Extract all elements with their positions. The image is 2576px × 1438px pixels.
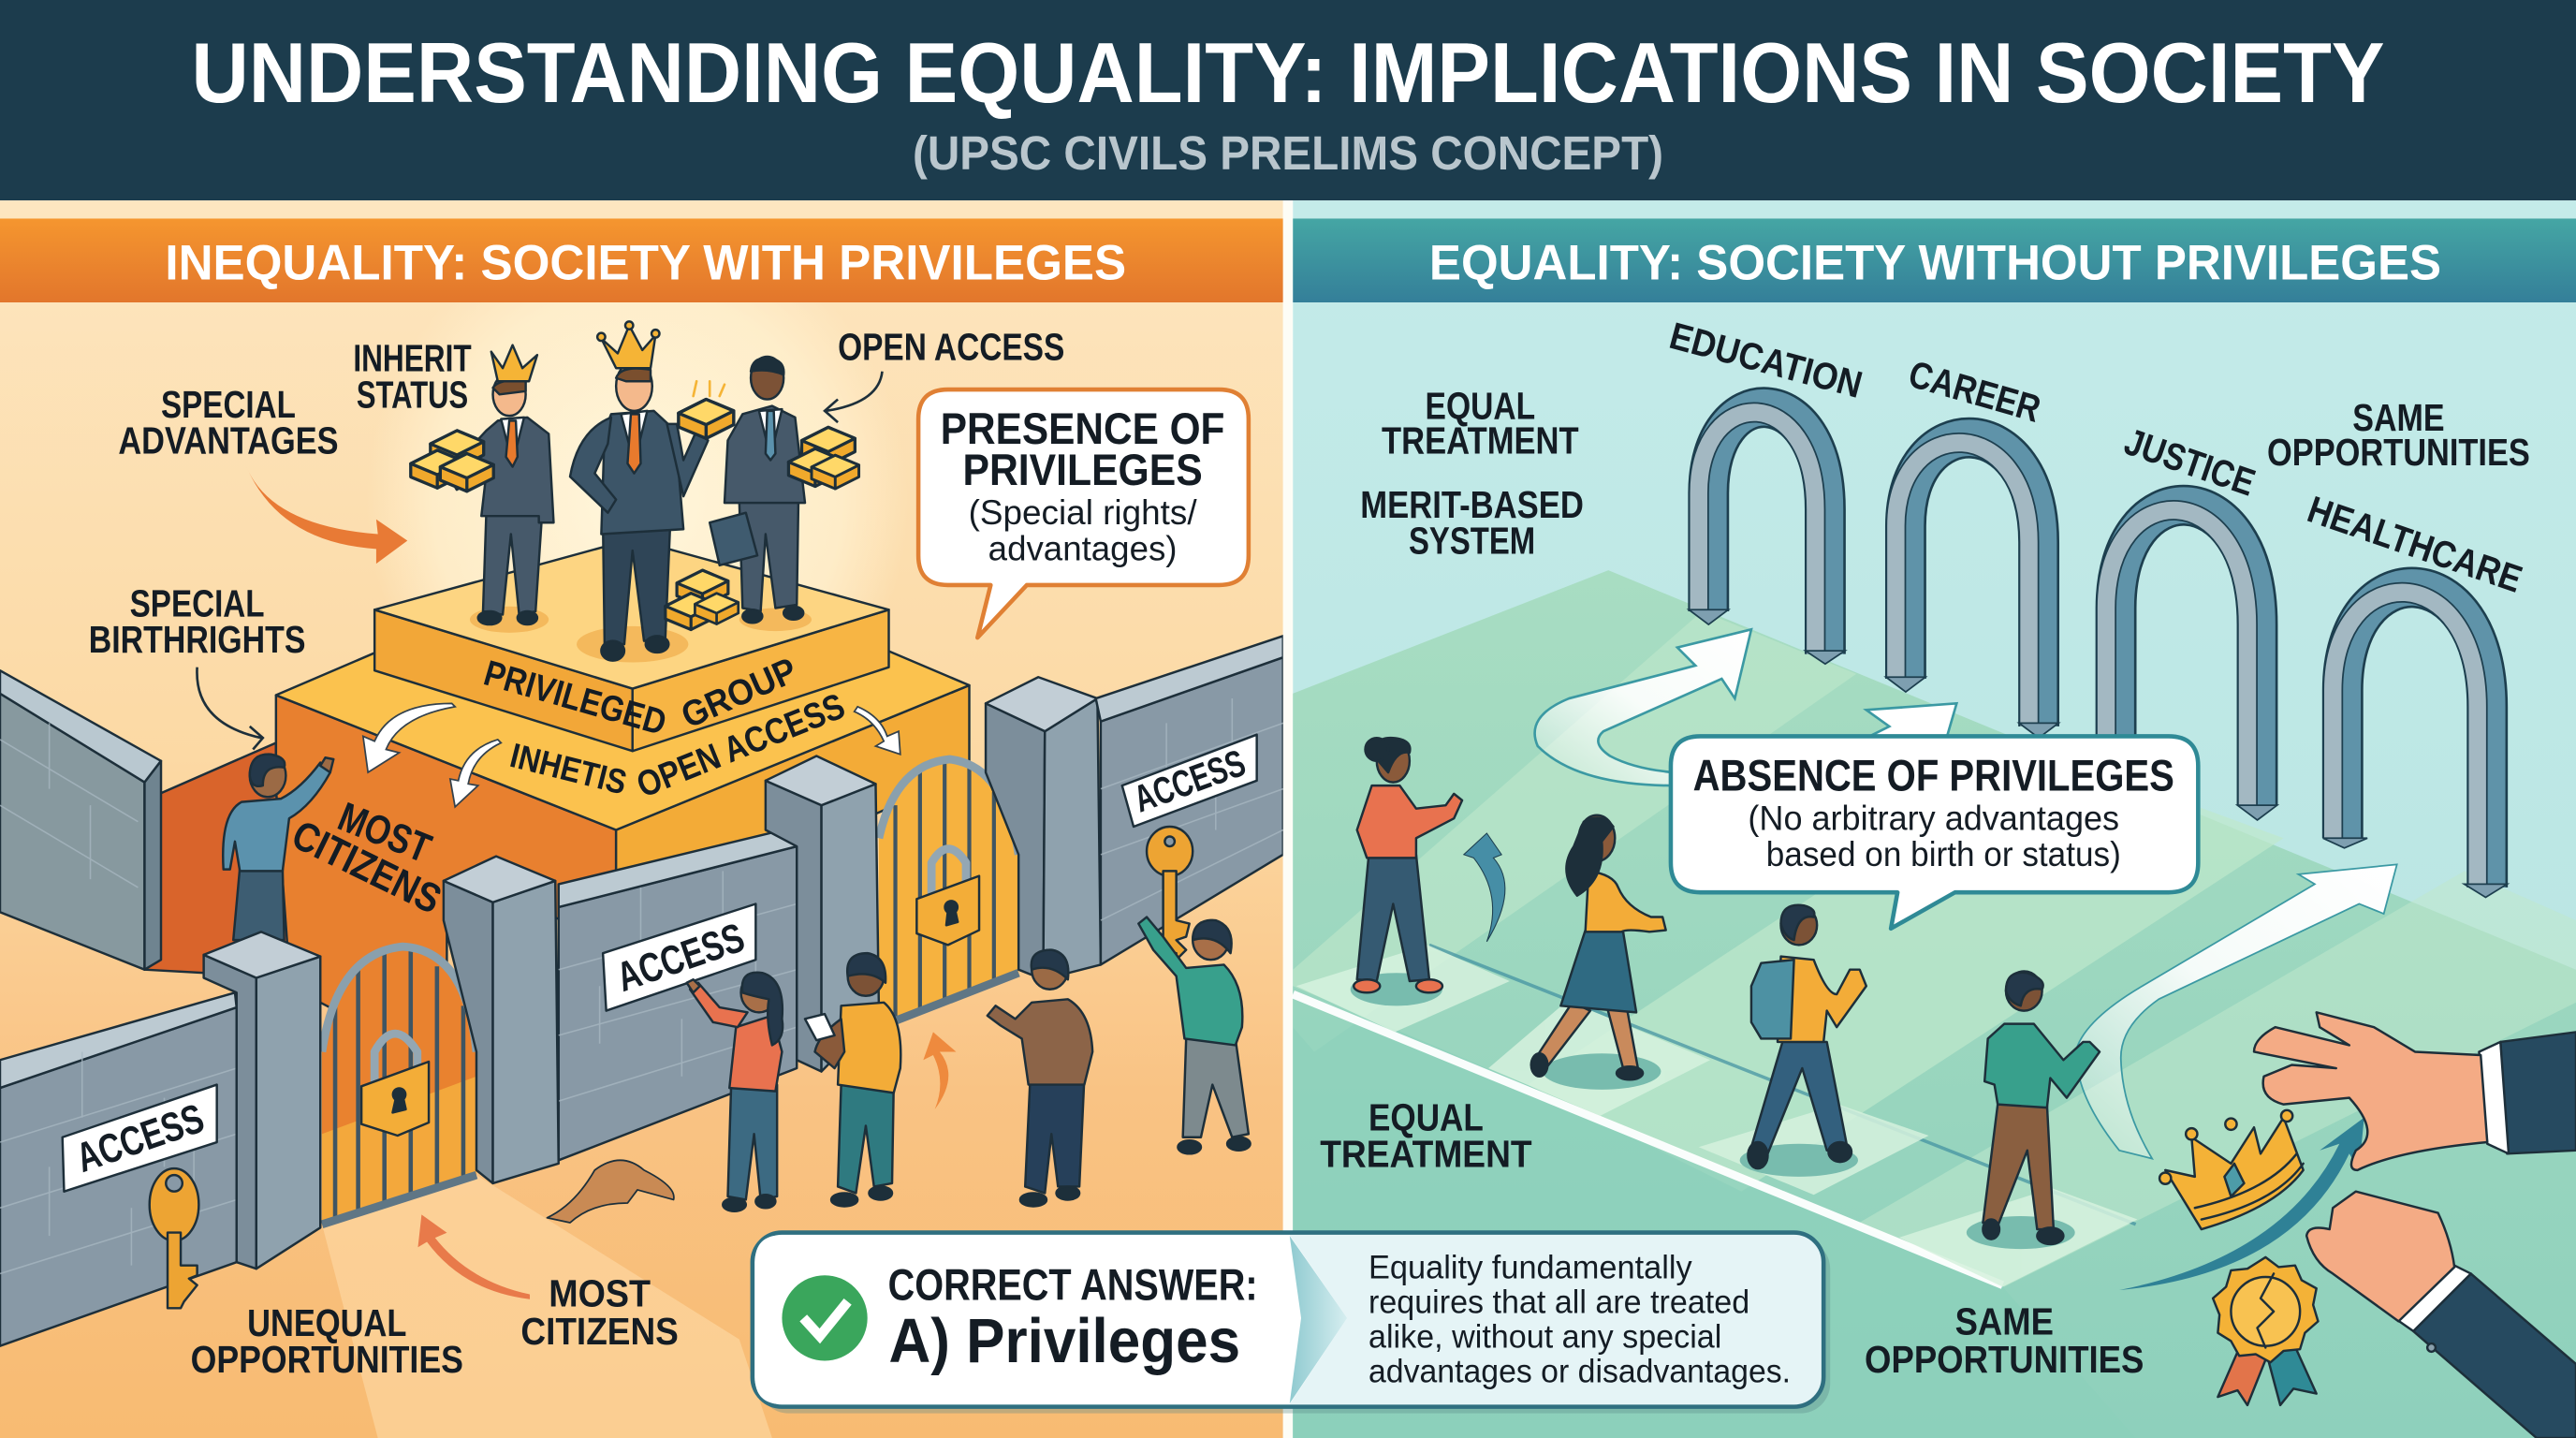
businessman left — [411, 345, 553, 633]
label: same opportunities top: OPPORTUNITIES — [2267, 431, 2530, 474]
presence of privileges speech bubble: (Special rights/ — [969, 493, 1197, 532]
absence of privileges speech bubble: (No arbitrary advantages — [1748, 799, 2119, 837]
upper left wall — [0, 670, 161, 970]
panel: inequality — [0, 200, 1283, 1438]
answer value: A) Privileges — [889, 1307, 1240, 1376]
gate one — [322, 946, 476, 1225]
correct answer card — [753, 1233, 1830, 1414]
label: special birthrights — [89, 581, 305, 661]
gate two — [879, 759, 1018, 1027]
person: walker in green — [1967, 971, 2100, 1249]
climbing person — [223, 755, 333, 940]
panel: equality — [1293, 200, 2576, 1438]
icon: lower hand — [2306, 1192, 2576, 1438]
label: open access: OPEN ACCESS — [838, 325, 1064, 368]
presence of privileges speech bubble: advantages) — [988, 530, 1178, 568]
label: unequal opportunities: UNEQUAL — [247, 1301, 406, 1344]
presence of privileges speech bubble: PRESENCE OF — [941, 404, 1224, 454]
privileged group label: GROUP — [676, 651, 803, 737]
label: justice: JUSTICE — [2119, 419, 2261, 504]
person: walker with backpack — [1740, 905, 1866, 1177]
businessman centre — [570, 321, 739, 662]
divider — [1283, 200, 1293, 1438]
arrow: special birthrights — [197, 668, 263, 749]
icon: check mark — [782, 1275, 868, 1360]
person: man in yellow with paper — [805, 953, 900, 1206]
pillar two — [444, 857, 559, 1183]
label: healthcare: HEALTHCARE — [2303, 487, 2527, 601]
label: unequal opportunities — [191, 1301, 463, 1381]
inequality heading: INEQUALITY: SOCIETY WITH PRIVILEGES — [165, 235, 1126, 290]
answer explanation — [1368, 1250, 1791, 1389]
label: same opportunities bottom: OPPORTUNITIES — [1865, 1338, 2144, 1381]
light rays on ground — [322, 1175, 772, 1438]
answer heading: CORRECT ANSWER: — [888, 1261, 1258, 1311]
answer explanation: advantages or disadvantages. — [1368, 1353, 1791, 1389]
broken rock on ground — [547, 1160, 674, 1223]
arch: education — [1689, 407, 1845, 664]
label: education: EDUCATION — [1665, 314, 1866, 406]
arrow: teal sweep — [2119, 1118, 2364, 1290]
label: same opportunities bottom — [1865, 1299, 2144, 1381]
right wall with access sign and key: ACCESS — [1128, 741, 1251, 820]
label: special advantages — [118, 383, 339, 462]
icon: crown — [491, 345, 537, 381]
arch: justice — [2106, 506, 2277, 820]
access sign lower left with key — [63, 1085, 217, 1308]
label: equal treatment bottom: TREATMENT — [1320, 1132, 1532, 1175]
person: walker in yellow — [1531, 815, 1666, 1090]
icon: key — [1147, 827, 1193, 960]
label: inherit status: INHERIT — [353, 337, 472, 380]
person: man in teal pointing — [1138, 917, 1251, 1153]
white down arrows — [363, 703, 900, 807]
padlock — [361, 1034, 429, 1136]
label: same opportunities top — [2267, 396, 2530, 474]
privileged group label — [479, 651, 803, 743]
label: merit based system — [1360, 483, 1584, 563]
arch: career — [1886, 438, 2058, 738]
subtitle: (UPSC CIVILS PRELIMS CONCEPT) — [913, 126, 1663, 180]
label: most citizens: CITIZENS — [520, 1310, 679, 1353]
label: special birthrights: SPECIAL — [130, 581, 265, 624]
pillar four — [986, 677, 1101, 979]
privileged group label: PRIVILEGED — [479, 653, 670, 743]
icon: backpack — [1751, 960, 1794, 1038]
arrow: white arrow to career — [1856, 703, 1956, 742]
label: special advantages: SPECIAL — [161, 383, 296, 426]
label: career: CAREER — [1904, 352, 2045, 431]
label: merit based system: SYSTEM — [1409, 520, 1535, 563]
person: walker in red — [1351, 738, 1462, 1005]
person: woman in red — [687, 973, 783, 1211]
label: same opportunities bottom: SAME — [1955, 1299, 2054, 1343]
label: most citizens: MOST — [549, 1272, 651, 1315]
mid wall with access sign: ACCESS — [611, 915, 750, 1001]
arrow: small up arrow — [923, 1032, 956, 1109]
arrow: white arrow to healthcare — [2076, 864, 2397, 1159]
header band — [0, 0, 2576, 200]
answer explanation: alike, without any special — [1368, 1318, 1721, 1355]
tier label — [506, 686, 851, 806]
tier label: OPEN ACCESS — [631, 686, 851, 806]
arrow: most citizens — [419, 1216, 529, 1299]
green floor — [1293, 570, 2576, 1438]
equality heading: EQUALITY: SOCIETY WITHOUT PRIVILEGES — [1429, 235, 2441, 290]
icon: falling crown — [2159, 1110, 2304, 1229]
lower left wall — [0, 992, 237, 1346]
tier label: INHETIS — [506, 736, 631, 802]
right wall with access sign and key — [1096, 636, 1283, 964]
title: UNDERSTANDING EQUALITY: IMPLICATIONS IN SOCIETY — [191, 25, 2385, 121]
access sign lower left with key: ACCESS — [70, 1095, 210, 1181]
icon: gold pile — [666, 570, 739, 630]
label: unequal opportunities: OPPORTUNITIES — [191, 1338, 463, 1381]
icon: key — [150, 1168, 198, 1308]
arrow: open access — [825, 372, 882, 422]
businessman right — [710, 357, 859, 631]
label: equal treatment bottom: EQUAL — [1368, 1096, 1484, 1139]
person: man in brown — [988, 950, 1092, 1206]
icon: briefcase — [710, 513, 757, 565]
arch: healthcare — [2323, 587, 2507, 897]
label: special birthrights: BIRTHRIGHTS — [89, 618, 305, 661]
label: equal treatment top — [1382, 385, 1579, 462]
icon: broken medal — [2213, 1257, 2318, 1405]
presence of privileges speech bubble — [918, 389, 1249, 638]
label: equal treatment bottom — [1320, 1096, 1532, 1175]
label: most citizens — [520, 1272, 679, 1353]
most citizens block label: CITIZENS — [285, 812, 448, 923]
most citizens block label: MOST — [331, 794, 437, 872]
label: inherit status — [353, 337, 472, 416]
arrow: curved white arrow to education — [1535, 629, 1751, 785]
privilege pyramid — [144, 539, 970, 1068]
icon: upper hand — [2254, 1012, 2576, 1170]
mid wall with access sign — [559, 827, 797, 1160]
pillar three — [766, 756, 879, 1072]
answer explanation: requires that all are treated — [1368, 1284, 1749, 1321]
absence of privileges speech bubble: based on birth or status) — [1766, 835, 2121, 873]
label: equal treatment top: TREATMENT — [1382, 418, 1579, 462]
label: merit based system: MERIT-BASED — [1360, 483, 1584, 526]
pillar one — [204, 932, 320, 1269]
absence of privileges speech bubble — [1671, 736, 2198, 929]
most citizens block label — [285, 794, 448, 923]
arrow: small teal up arrow — [1464, 833, 1505, 942]
presence of privileges speech bubble: PRIVILEGES — [962, 446, 1203, 495]
icon: crown — [597, 321, 659, 368]
answer explanation: Equality fundamentally — [1368, 1250, 1692, 1286]
label: special advantages: ADVANTAGES — [118, 418, 339, 462]
padlock — [916, 849, 979, 945]
absence of privileges speech bubble: ABSENCE OF PRIVILEGES — [1693, 751, 2174, 800]
label: inherit status: STATUS — [357, 373, 468, 416]
label: equal treatment top: EQUAL — [1426, 385, 1535, 428]
walkway tiles — [1296, 945, 2137, 1287]
label: same opportunities top: SAME — [2352, 396, 2445, 439]
arrow: special advantages — [246, 467, 407, 564]
